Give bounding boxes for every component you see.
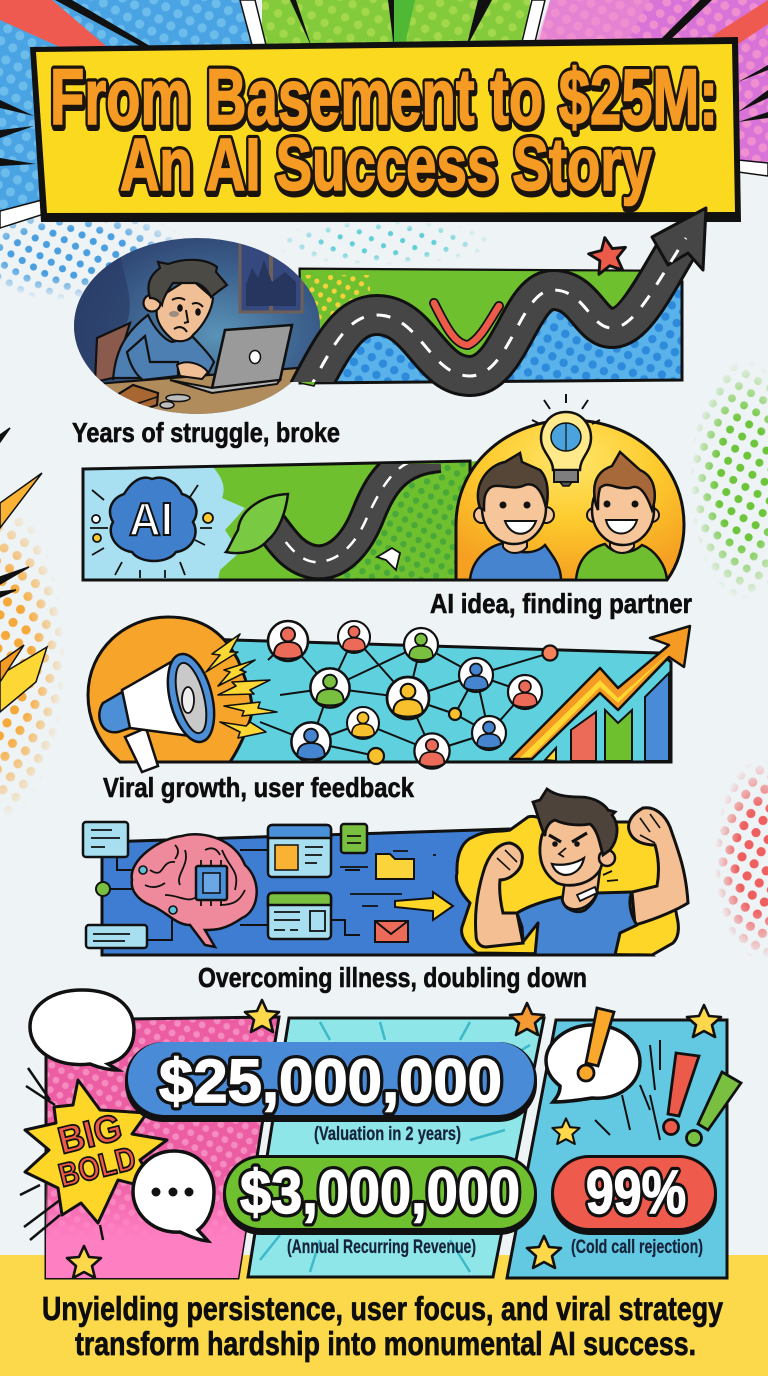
icon: AI brain chip (90, 478, 213, 578)
user network (260, 621, 558, 769)
stat label: valuation: (Valuation in 2 years) (314, 1124, 461, 1145)
icon: red and green exclamation marks (664, 1053, 741, 1146)
icon: AI brain chip: AI (129, 493, 173, 545)
caption: overcoming illness: Overcoming illness, doubling down (198, 962, 587, 993)
stat pill: ARR: $3,000,000 (240, 1158, 520, 1226)
icon: folder (376, 854, 414, 879)
conclusion text (42, 1290, 724, 1362)
icon: green leaf (226, 494, 288, 553)
winding road arrow (308, 208, 706, 392)
stat pill: valuation: $25,000,000 (159, 1047, 502, 1115)
dashes (340, 851, 436, 906)
yellow backdrop (456, 816, 678, 955)
growth arrow (510, 626, 690, 759)
icon: lightbulb with brain (532, 394, 600, 486)
speech bubble: ellipsis (133, 1151, 214, 1241)
face details (549, 833, 587, 842)
road strip background (300, 269, 682, 386)
hair (533, 789, 617, 855)
icon: browser windows (268, 824, 367, 939)
stat pill: valuation: $25,000,000 (159, 1047, 502, 1115)
burst: BIG BOLD (25, 1080, 167, 1223)
top sunburst background (0, 0, 768, 228)
right arm (629, 808, 688, 925)
speech bubble: exclamation (546, 1008, 640, 1102)
icon: note cards (83, 822, 147, 948)
caption: AI idea: AI idea, finding partner (430, 588, 692, 619)
panel: title banner (30, 37, 741, 222)
stat pill: ARR: $3,000,000 (240, 1158, 520, 1226)
stat pill: rejection: 99% (586, 1158, 686, 1226)
stat pill: rejection (551, 1155, 717, 1235)
icon: red star (586, 234, 629, 275)
orange circle backdrop (88, 617, 252, 762)
illustration: two partners with lightbulb (456, 394, 684, 580)
stat pill: rejection: 99% (586, 1158, 686, 1226)
comic burst spikes left edge (0, 428, 47, 712)
stat label: rejection: (Cold call rejection) (571, 1237, 703, 1258)
teal strip (200, 639, 671, 762)
red rebound mark (434, 303, 499, 345)
panel 1: years of struggle (70, 208, 706, 420)
head (540, 820, 604, 885)
panel 3: viral growth (88, 617, 690, 772)
panel 4: overcoming illness (83, 789, 688, 955)
illustration: struggling founder at laptop (70, 238, 320, 420)
speech bubble: top left (30, 990, 134, 1070)
icon: spark (377, 548, 400, 570)
left arm (475, 843, 523, 947)
halftone dot accents (0, 205, 768, 960)
action lines around burst (20, 1068, 103, 1240)
icon: megaphone (99, 649, 222, 772)
burst text (46, 1105, 139, 1194)
neck (562, 870, 600, 909)
panel 2: AI idea, finding partner (83, 394, 684, 580)
panel: pink stat panel (46, 1017, 279, 1278)
burst text: BOLD (55, 1139, 139, 1194)
illustration: flexing man (475, 789, 688, 955)
fist lines (497, 814, 660, 870)
connector lines (103, 850, 360, 940)
panel: teal stat panel (248, 1018, 544, 1277)
footer band (0, 1255, 768, 1376)
stars (67, 1000, 721, 1278)
caption: viral growth: Viral growth, user feedback (103, 772, 414, 803)
t-shirt (517, 892, 637, 955)
blue strip (102, 829, 652, 955)
road through meadow (270, 455, 440, 562)
stat label: ARR: (Annual Recurring Revenue) (287, 1237, 476, 1258)
yellow arrow (395, 892, 453, 920)
icon: green node (96, 882, 110, 896)
growth bar chart (545, 673, 669, 761)
icon: envelope (375, 921, 408, 942)
icon: brain with chip (132, 834, 257, 947)
burst text: BIG (54, 1107, 126, 1163)
neck bandage (577, 887, 597, 901)
stat pill: valuation (125, 1042, 537, 1122)
panel: blue stat panel (507, 1020, 727, 1278)
strip background (83, 461, 480, 580)
caption: years of struggle: Years of struggle, broke (72, 417, 340, 448)
title text (50, 52, 719, 209)
yellow lightning bolts (206, 634, 277, 738)
